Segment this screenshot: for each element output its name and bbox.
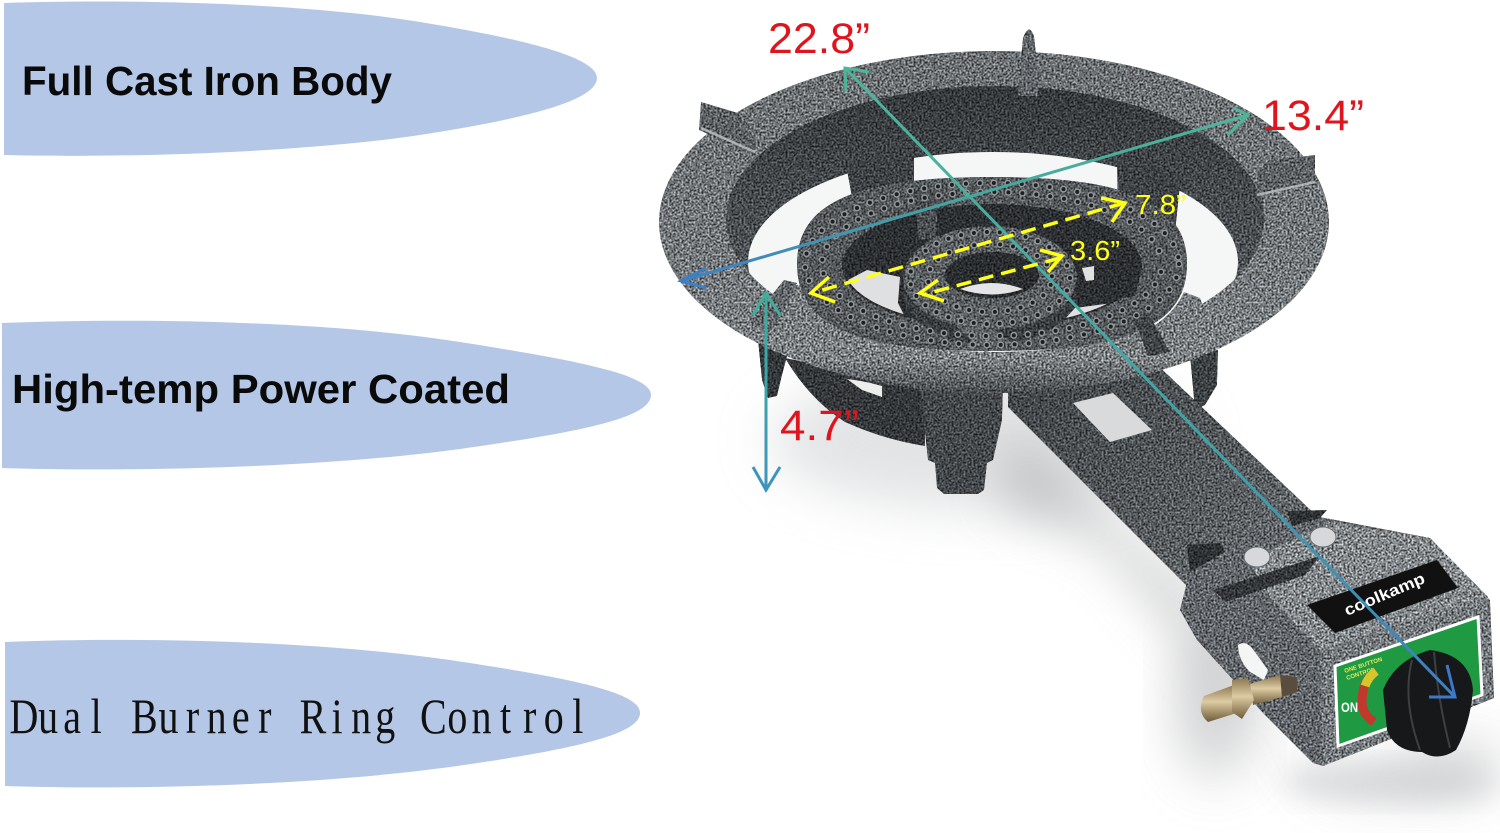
callout: full cast iron body: Full Cast Iron Body bbox=[22, 58, 392, 104]
green control label: ONE BUTTON bbox=[1344, 657, 1383, 675]
callout: high-temp power coated: High-temp Power Coated bbox=[12, 366, 510, 412]
gas valve box bbox=[1180, 510, 1494, 766]
callout: dual burner ring control bbox=[5, 640, 640, 787]
arrow: 22.8 inch total length bbox=[845, 68, 1455, 697]
inner support legs bbox=[846, 150, 1181, 225]
inner burner skirt bbox=[903, 240, 1077, 344]
centre opening bbox=[748, 150, 1238, 372]
green control label: CONTROL bbox=[1346, 667, 1376, 682]
inner burner ring bbox=[903, 226, 1077, 330]
burner right rib bbox=[1133, 313, 1170, 356]
arrow: 13.4 inch ring diameter bbox=[681, 108, 1248, 288]
brace slit opening bbox=[847, 379, 882, 397]
stove lower casting bbox=[659, 29, 1329, 586]
handle slot opening bbox=[1073, 393, 1152, 442]
brand plate bbox=[1307, 560, 1458, 633]
label: 4.7 inches: 4.7” bbox=[780, 402, 859, 450]
outer ring opening bbox=[842, 204, 1142, 328]
box casing faces bbox=[1180, 510, 1494, 766]
label: 13.4 inches: 13.4” bbox=[1262, 92, 1364, 140]
callout: dual burner ring control: Dual Burner Ring Control bbox=[10, 689, 583, 744]
control knob bbox=[1383, 650, 1473, 757]
right leg bbox=[1190, 350, 1218, 410]
arrow: 7.8 inch outer burner bbox=[811, 198, 1125, 302]
handle bbox=[1008, 358, 1318, 586]
label: 22.8 inches: 22.8” bbox=[768, 15, 870, 63]
label: 7.8 inches: 7.8” bbox=[1135, 189, 1186, 220]
burner stove bbox=[659, 29, 1494, 766]
under-ring brace bbox=[785, 358, 925, 446]
front leg bbox=[920, 385, 1003, 494]
left leg bbox=[758, 340, 790, 398]
green control label bbox=[1335, 617, 1482, 746]
outer ring body bbox=[659, 51, 1329, 393]
soft floor shadows bbox=[770, 370, 1500, 800]
lower spoke bbox=[943, 308, 1015, 352]
callout: high-temp power coated bbox=[2, 321, 651, 469]
right casting with notch bbox=[1075, 253, 1142, 304]
ring inner wall bbox=[726, 86, 1264, 352]
tab highlights bbox=[701, 128, 1315, 195]
label: 3.6 inches: 3.6” bbox=[1070, 235, 1120, 266]
callout: full cast iron body bbox=[4, 1, 597, 156]
gas burner bbox=[797, 177, 1187, 356]
brass gas fitting bbox=[1201, 675, 1297, 722]
side hole bbox=[1238, 643, 1268, 680]
outer burner ring bbox=[797, 177, 1187, 351]
brand plate: coolkamp bbox=[1342, 570, 1428, 620]
burner port dots bbox=[805, 183, 1179, 345]
mounting screws bbox=[1244, 527, 1336, 567]
arrow: 4.7 inch height bbox=[753, 293, 780, 490]
rear spoke bbox=[915, 190, 937, 240]
white gaps inside opening bbox=[848, 270, 1108, 318]
green control label: ON bbox=[1341, 699, 1358, 715]
inner ring opening bbox=[945, 252, 1039, 298]
arrow: 3.6 inch inner burner bbox=[920, 250, 1062, 301]
ring front fillers and tabs bbox=[699, 31, 1315, 350]
rear spike tab bbox=[1017, 29, 1041, 100]
inner opening gap bbox=[960, 283, 1023, 294]
